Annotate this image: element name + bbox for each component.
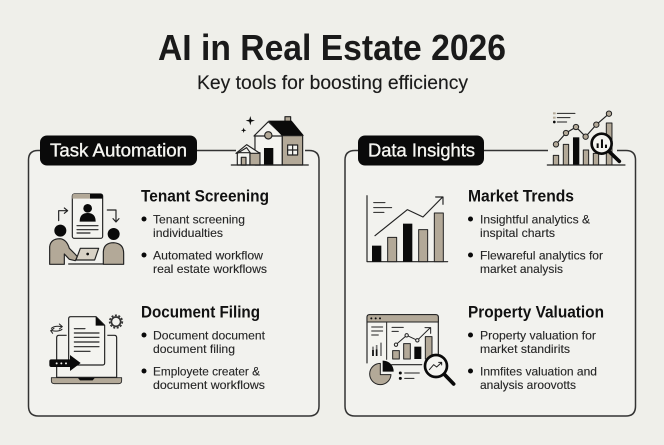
title: AI in Real Estate 2026 [158, 27, 506, 68]
bullets: Market Trends: market analysis [480, 262, 563, 276]
subtitle: Key tools for boosting efficiency [197, 72, 468, 94]
bullets: Property Valuation: market standirits [480, 342, 570, 356]
item: Property Valuation [367, 304, 604, 392]
bullets: Tenant Screening [142, 212, 267, 276]
section label: Data Insights: Data Insights [368, 140, 475, 160]
bullets: Market Trends [468, 212, 603, 276]
bullets: Market Trends: Insightful analytics & [480, 212, 590, 226]
panel: Data Insights [345, 111, 636, 416]
bullets: Tenant Screening: Automated workflow [153, 248, 263, 262]
bullets: Document Filing: document filing [153, 342, 235, 356]
icon: valuation dashboard [367, 315, 454, 385]
bullets: Tenant Screening: Tenant screening [153, 212, 245, 226]
item: Document Filing [49, 304, 266, 392]
icon: houses [231, 116, 308, 165]
bullets: Document Filing: document workflows [153, 378, 265, 392]
bullets: Property Valuation: Inmfites valuation and [480, 364, 597, 378]
item: Market Trends [367, 188, 603, 276]
icon: tenant screening [50, 194, 124, 264]
bullets: Tenant Screening: real estate workflows [153, 262, 267, 276]
bullets: Property Valuation: analysis aroovotts [480, 378, 576, 392]
section label: Data Insights [358, 136, 484, 166]
heading: Document Filing: Document Filing [141, 304, 260, 322]
bullets: Tenant Screening: individualties [153, 226, 223, 240]
panel: Task Automation [28, 116, 319, 416]
bullets: Document Filing [142, 328, 266, 392]
icon: analytics with magnifier [547, 111, 625, 165]
bullets: Market Trends: inspital charts [480, 226, 555, 240]
icon: document filing [49, 315, 122, 384]
bullets: Document Filing: Document document [153, 328, 266, 342]
heading: Property Valuation: Property Valuation [468, 304, 604, 322]
heading: Tenant Screening: Tenant Screening [141, 188, 269, 206]
item: Tenant Screening [50, 188, 269, 276]
section label: Task Automation [40, 136, 197, 166]
heading: Market Trends: Market Trends [468, 188, 574, 206]
bullets: Property Valuation [468, 328, 597, 392]
bullets: Market Trends: Flewareful analytics for [480, 248, 603, 262]
bullets: Document Filing: Employete creater & [153, 364, 260, 378]
icon: market trends chart [367, 196, 448, 262]
bullets: Property Valuation: Property valuation for [480, 328, 596, 342]
section label: Task Automation: Task Automation [50, 140, 187, 160]
